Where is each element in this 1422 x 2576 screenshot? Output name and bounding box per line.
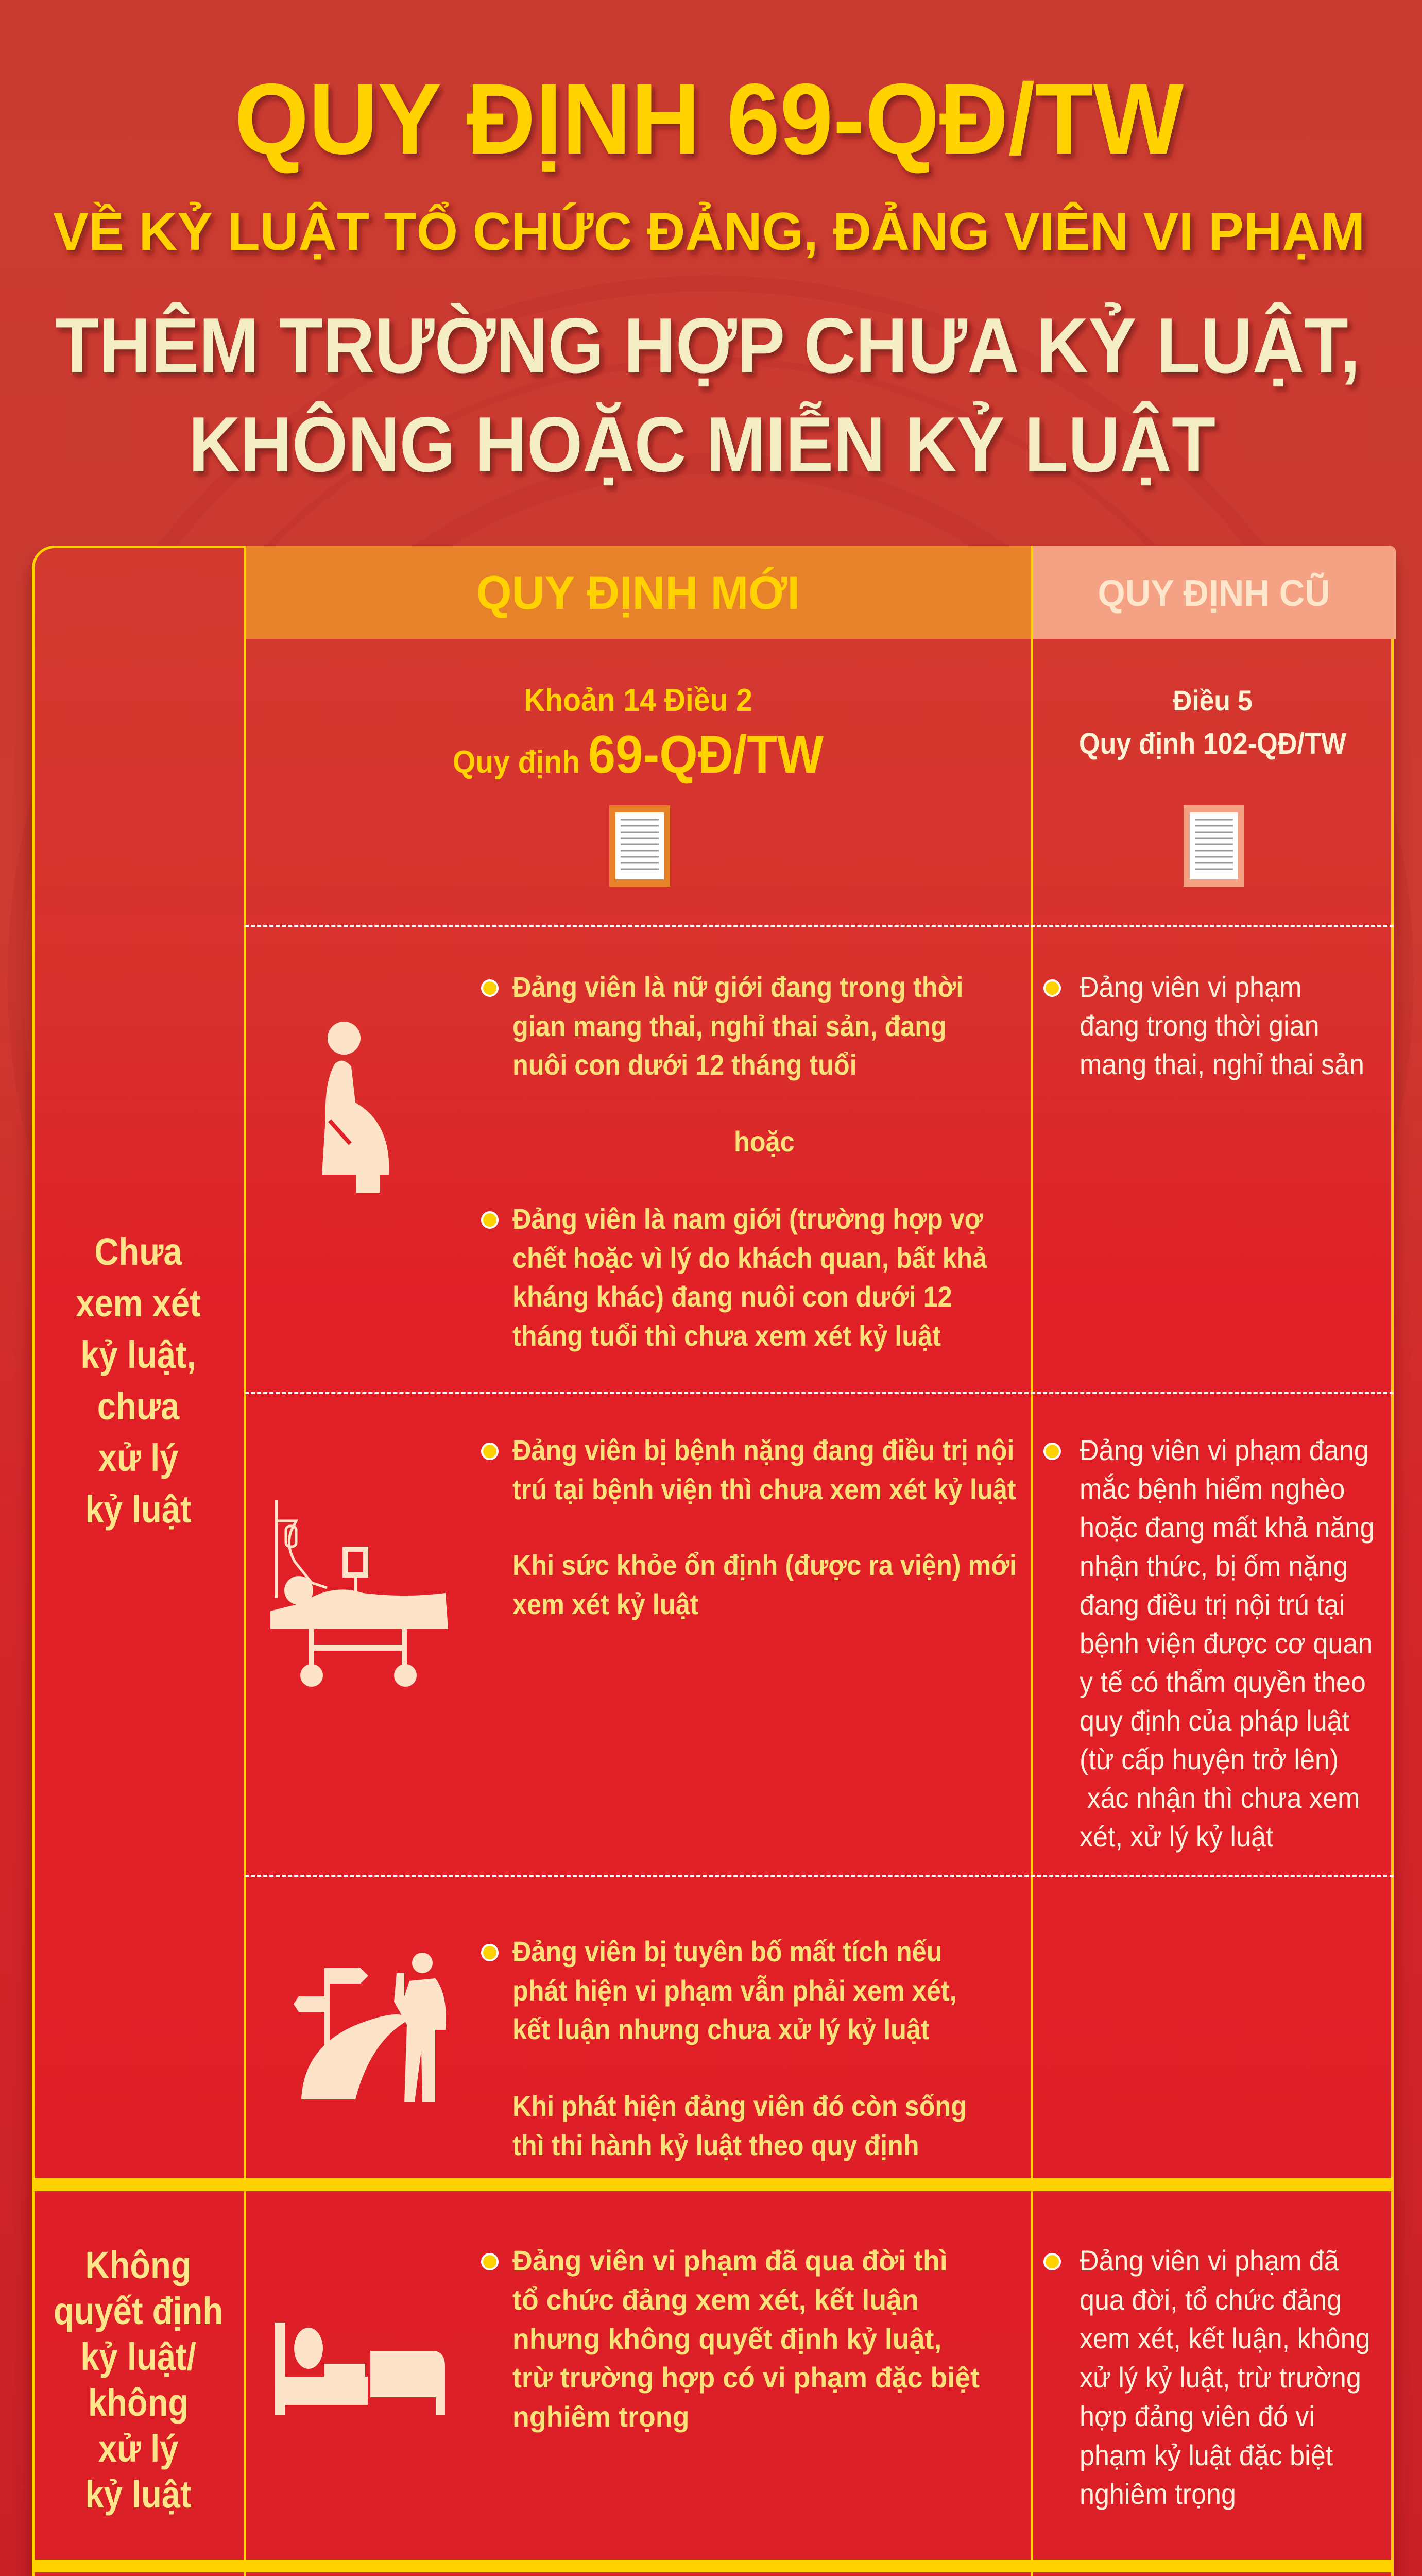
text: Đảng viên bị tuyên bố mất tích nếu [512,1935,942,1968]
label: chua xem xet ky luat [76,1230,201,1531]
label: khong quyet dinh ky luat [54,2244,223,2516]
label: chua xem xet ky luat: xem xét [76,1282,201,1325]
text: trừ trường hợp có vi phạm đặc biệt [512,2361,980,2394]
text: đang trong thời gian [1080,1009,1320,1042]
text: hoac: hoặc [734,1125,795,1158]
old regulation reference: Điều 5 [1173,684,1253,717]
row4 new [481,2253,499,2270]
text: y tế có thẩm quyền theo [1080,1666,1366,1698]
text: đang điều trị nội trú tại [1080,1588,1345,1621]
row1 old [1043,979,1061,997]
row4 old [1043,2253,1061,2270]
text: Đảng viên vi phạm đã [1080,2244,1339,2277]
text: nghiêm trọng [1080,2478,1236,2510]
text: Đảng viên bị bệnh nặng đang điều trị nội [512,1434,1014,1466]
new regulation reference [453,683,824,785]
text: phát hiện vi phạm vẫn phải xem xét, [512,1974,957,2006]
icon: hospital bed [270,1500,448,1687]
text: xử lý kỷ luật, trừ trường [1080,2361,1361,2394]
header: quy dinh cu: QUY ĐỊNH CŨ [1098,573,1330,614]
label: chua xem xet ky luat: xử lý [98,1436,178,1479]
text: qua đời, tổ chức đảng [1080,2283,1342,2315]
text: bệnh viện được cơ quan [1080,1627,1373,1659]
comparison table [32,546,1394,2576]
text: Đảng viên vi phạm đang [1080,1434,1369,1466]
text: Đảng viên là nam giới (trường hợp vợ [512,1202,983,1235]
label: khong quyet dinh ky luat: quyết định [54,2290,223,2332]
text: mang thai, nghỉ thai sản [1080,1048,1364,1080]
header: quy dinh cu [1032,546,1396,639]
label: khong quyet dinh ky luat: kỷ luật [85,2473,192,2516]
title: QUY ĐỊNH 69-QĐ/TW [234,63,1184,175]
text: Đảng viên vi phạm đã qua đời thì [512,2244,948,2277]
text: gian mang thai, nghỉ thai sản, đang [512,1010,947,1042]
label: chua xem xet ky luat: Chưa [94,1230,182,1273]
text: hoặc đang mất khả năng [1080,1511,1375,1544]
label: chua xem xet ky luat: kỷ luật [85,1488,192,1531]
text: trú tại bệnh viện thì chưa xem xét kỷ luật [512,1472,1016,1505]
text: xem xét, kết luận, không [1080,2322,1370,2354]
text: phạm kỷ luật đặc biệt [1080,2439,1333,2471]
text: nghiêm trọng [512,2400,689,2433]
text: chết hoặc vì lý do khách quan, bất khả [512,1242,987,1274]
row1 new [481,979,499,997]
label: khong quyet dinh ky luat: kỷ luật/ [80,2335,196,2378]
text: quy định của pháp luật [1080,1704,1349,1737]
text: kết luận nhưng chưa xử lý kỷ luật [512,2013,930,2045]
old regulation reference: Quy định 102-QĐ/TW [1079,727,1346,760]
column lines [244,546,246,2576]
icon: missing person with signpost [294,1953,446,2102]
icon: document new [609,805,670,887]
header: quy dinh moi [245,546,1032,639]
row2 new [481,1443,499,1460]
text: Khi sức khỏe ổn định (được ra viện) mới [512,1549,1017,1581]
label: khong quyet dinh ky luat: không [88,2381,189,2424]
text: tổ chức đảng xem xét, kết luận [512,2283,919,2316]
text: hợp đảng viên đó vi [1080,2400,1315,2432]
new regulation reference: Khoản 14 Điều 2 [524,683,752,718]
text: (từ cấp huyện trở lên) [1080,1743,1339,1775]
text: nhưng không quyết định kỷ luật, [512,2323,941,2355]
text: mắc bệnh hiểm nghèo [1080,1472,1345,1505]
icon: document old [1184,805,1244,887]
text: Đảng viên là nữ giới đang trong thời [512,971,963,1003]
label: chua xem xet ky luat: kỷ luật, [80,1333,196,1376]
title [53,63,1367,493]
label: khong quyet dinh ky luat: Không [85,2244,192,2286]
icon: pregnant woman [322,1022,389,1193]
text: xác nhận thì chưa xem [1087,1782,1360,1814]
text: kháng khác) đang nuôi con dưới 12 [512,1280,952,1313]
row2 old [1043,1443,1061,1460]
text: xem xét kỷ luật [512,1588,698,1620]
title: KHÔNG HOẶC MIỄN KỶ LUẬT [189,401,1215,488]
text: thì thi hành kỷ luật theo quy định [512,2129,919,2161]
new regulation reference: Quy định 69-QĐ/TW [453,725,824,785]
row3 new [481,1944,499,1961]
icon: bed [275,2323,445,2415]
text: tháng tuổi thì chưa xem xét kỷ luật [512,1319,941,1352]
title: VỀ KỶ LUẬT TỔ CHỨC ĐẢNG, ĐẢNG VIÊN VI PHẠM [53,201,1365,262]
text: nuôi con dưới 12 tháng tuổi [512,1048,857,1081]
old regulation reference [1079,684,1346,760]
text: Đảng viên vi phạm [1080,971,1301,1003]
text: nhận thức, bị ốm nặng [1080,1550,1348,1582]
header: quy dinh moi: QUY ĐỊNH MỚI [476,567,800,619]
label: chua xem xet ky luat: chưa [97,1385,179,1428]
label: khong quyet dinh ky luat: xử lý [98,2427,178,2470]
text: xét, xử lý kỷ luật [1080,1820,1273,1853]
text: Khi phát hiện đảng viên đó còn sống [512,2090,967,2122]
